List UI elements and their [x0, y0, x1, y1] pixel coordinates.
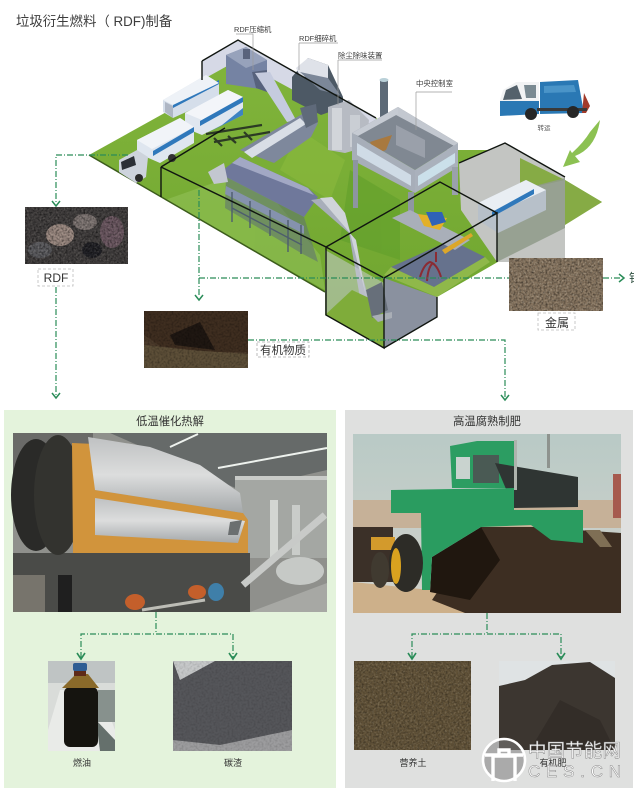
receiving container	[478, 180, 546, 233]
plant isometric diagram	[89, 40, 602, 348]
panel heading: 低温催化热解	[136, 414, 204, 428]
watermark logo	[483, 739, 621, 781]
control room	[352, 107, 458, 220]
organic fertilizer caption: 有机肥	[539, 757, 567, 768]
floor front edge	[89, 155, 325, 292]
equipment labels	[234, 25, 453, 130]
fuel oil caption: 燃油	[73, 757, 91, 768]
inclined sorter conveyor	[240, 104, 318, 163]
trailer 1	[163, 75, 219, 118]
shredder box interior	[325, 250, 437, 348]
metal label	[538, 313, 575, 330]
pyrolysis reactor photo	[11, 433, 327, 612]
photo: nutrient soil	[354, 661, 471, 750]
equipment labels: 除尘除味装置	[338, 51, 382, 60]
exhaust stack	[380, 78, 388, 120]
scrubber tanks	[328, 100, 369, 153]
green floor	[89, 40, 602, 348]
pit surround	[384, 257, 490, 297]
flow arrowheads	[52, 201, 624, 400]
right room wall	[459, 143, 565, 262]
RDF label: RDF	[44, 271, 68, 285]
floor reflections	[165, 130, 400, 290]
photo: organic matter	[144, 311, 248, 368]
truck caption: 转运	[538, 123, 551, 132]
metal label: 金属	[545, 315, 569, 330]
trailer 2	[185, 90, 243, 135]
inclined conveyor	[255, 72, 296, 122]
watermark text: 中国节能网	[528, 740, 621, 761]
equipment labels: 中央控制室	[416, 79, 453, 88]
sorting drum	[208, 157, 318, 262]
RDF compressor	[226, 47, 267, 92]
branch arrows	[408, 613, 565, 659]
right room interior	[520, 158, 602, 225]
green feed arrow	[563, 120, 600, 167]
enclosure frame lines	[161, 40, 565, 348]
photo: RDF	[25, 207, 128, 264]
truck with trailer	[119, 118, 194, 183]
right room floor shade	[497, 178, 565, 262]
photo: carbon residue	[173, 661, 292, 751]
organic matter label: 有机物质	[260, 343, 306, 357]
equipment labels: RDF压缩机	[234, 25, 272, 34]
panel heading: 高温腐熟制肥	[453, 414, 521, 428]
waste pit	[391, 240, 485, 287]
crane rail	[392, 210, 473, 254]
conveyor rack	[206, 125, 270, 146]
back wall	[202, 40, 376, 135]
photo: metal	[509, 258, 603, 311]
RDF label	[38, 269, 73, 286]
fine shredder room	[292, 58, 343, 115]
photo: organic fertilizer	[499, 661, 615, 750]
panel: high-temperature composting	[345, 410, 633, 788]
carbon residue caption: 碳渣	[224, 757, 242, 768]
nutrient soil caption: 营养土	[399, 757, 427, 768]
collection truck icon	[500, 80, 590, 120]
flow lines	[56, 155, 622, 398]
branch arrows	[77, 612, 237, 659]
photo: fuel oil bottle	[48, 661, 115, 751]
grab	[420, 252, 441, 281]
compost turner photo	[353, 434, 621, 613]
title: 垃圾衍生燃料（ RDF)制备	[16, 13, 173, 29]
watermark emblem	[483, 739, 525, 781]
bucket elevator chute	[311, 197, 369, 310]
watermark logo: CES.CN	[528, 762, 621, 781]
panel: low-temperature catalytic pyrolysis	[4, 410, 336, 788]
equipment labels: RDF细碎机	[299, 34, 337, 43]
